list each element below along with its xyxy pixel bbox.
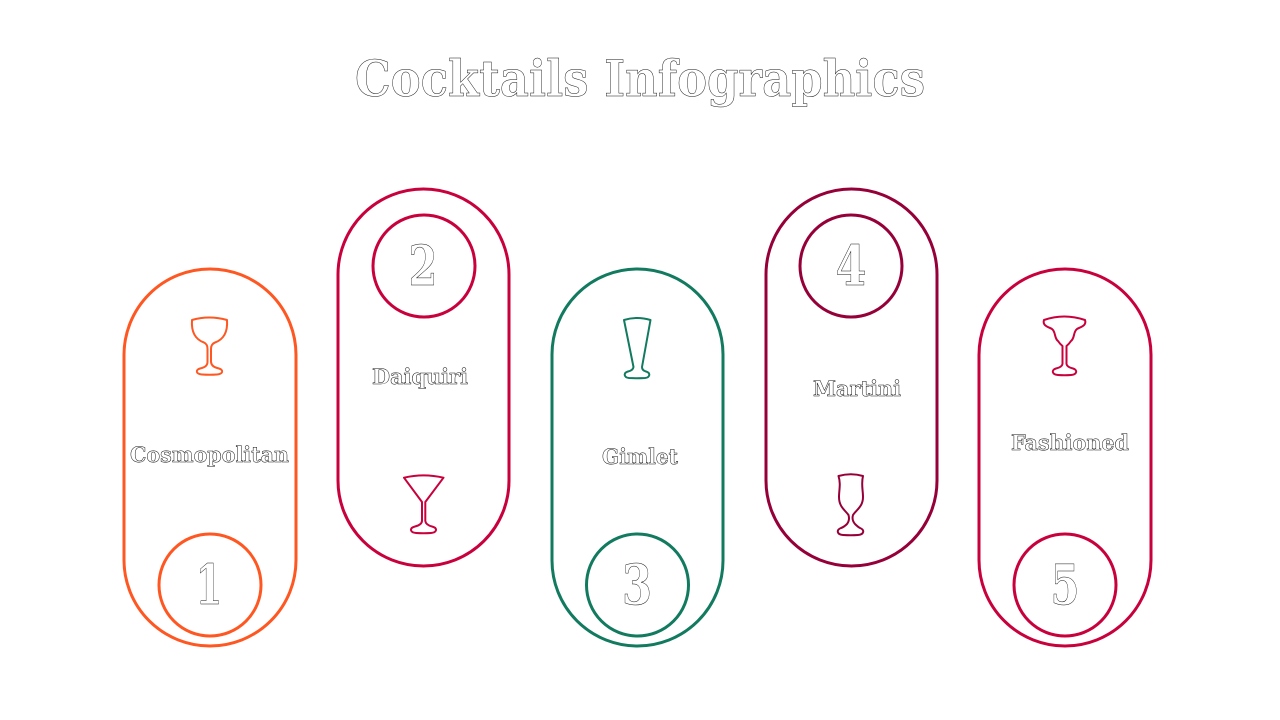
number 4: 4 xyxy=(836,233,866,298)
panel: Daiquiri xyxy=(338,189,509,566)
number circle 5 xyxy=(1014,534,1116,636)
number circle 2 xyxy=(373,215,475,317)
number 5: 5 xyxy=(1050,552,1080,617)
pill outline 5 xyxy=(979,269,1151,646)
pill outline 3 xyxy=(552,269,723,646)
label: Fashioned: Fashioned xyxy=(1011,430,1129,455)
number 1: 1 xyxy=(196,552,222,617)
label: Daiquiri: Daiquiri xyxy=(372,364,468,389)
panel: Gimlet xyxy=(552,269,723,646)
number 2: 2 xyxy=(408,233,438,298)
pill outline 2 xyxy=(338,189,509,566)
icon: pilsner glass xyxy=(624,318,650,378)
label: Martini: Martini xyxy=(813,376,901,401)
icon: margarita glass xyxy=(1044,316,1085,375)
icon: hurricane glass xyxy=(838,474,863,535)
title: Cocktails Infographics xyxy=(355,49,925,108)
panel: Cosmopolitan xyxy=(124,269,296,646)
pill outline 4 xyxy=(766,189,937,566)
label: Cosmopolitan: Cosmopolitan xyxy=(130,442,289,467)
icon: coupe glass xyxy=(192,318,227,375)
icon: martini glass xyxy=(404,475,444,533)
number circle 1 xyxy=(159,534,261,636)
panel: Martini xyxy=(766,189,937,566)
number circle 4 xyxy=(800,215,902,317)
number circle 3 xyxy=(586,534,688,636)
label: Gimlet: Gimlet xyxy=(602,444,678,469)
number 3: 3 xyxy=(622,552,652,617)
pill outline 1 xyxy=(124,269,296,646)
panel: Fashioned xyxy=(979,269,1151,646)
